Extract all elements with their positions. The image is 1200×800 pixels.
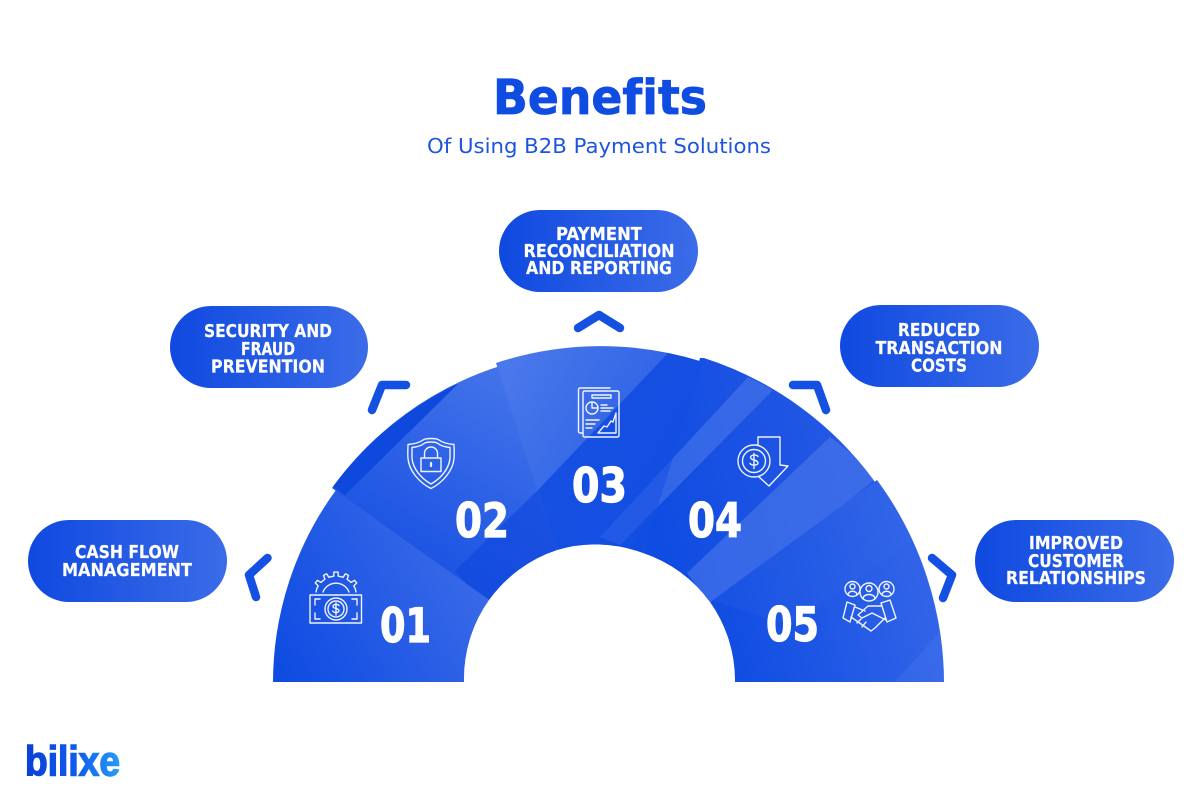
- number 03: 03: [572, 459, 627, 514]
- semicircle chart: [273, 346, 950, 682]
- subtitle: Of Using B2B Payment Solutions: [427, 134, 771, 158]
- icon: report document: [578, 388, 619, 437]
- pill: security and fraud prevention: [170, 306, 368, 388]
- icon: cash and gear: [310, 572, 362, 623]
- pill: improved customer relationships: CUSTOMER: [1028, 552, 1124, 572]
- pill: payment reconciliation and reporting: PAYMENT: [556, 225, 642, 245]
- pill: security and fraud prevention: SECURITY AND: [204, 322, 332, 342]
- number 01: 01: [380, 599, 431, 654]
- pill: payment reconciliation and reporting: RECONCILIATION: [524, 242, 674, 262]
- pill: security and fraud prevention: FRAUD: [241, 340, 295, 360]
- pill: payment reconciliation and reporting: AND REPORTING: [526, 259, 672, 279]
- arrow: to customer relationships: [932, 558, 952, 598]
- pill: security and fraud prevention: PREVENTION: [211, 358, 325, 378]
- pill: cash flow management: CASH FLOW: [75, 543, 179, 563]
- arrow: to security: [372, 385, 406, 410]
- arrow: to cash flow: [249, 558, 268, 597]
- pill: payment reconciliation and reporting: [499, 210, 698, 292]
- segment 02: [332, 366, 557, 600]
- segment 05: [710, 480, 950, 682]
- pill: reduced transaction costs: TRANSACTION: [876, 339, 1002, 359]
- title: Benefits: [493, 70, 707, 126]
- arrow: to transaction costs: [793, 385, 826, 410]
- number 05: 05: [766, 598, 819, 653]
- arrow: to reconciliation: [578, 315, 620, 328]
- pill: cash flow management: MANAGEMENT: [62, 561, 192, 581]
- pill: improved customer relationships: [975, 520, 1174, 602]
- segment 01: [273, 490, 489, 682]
- number 02: 02: [455, 494, 509, 549]
- logo: bilixe: [25, 738, 120, 784]
- icon: customer handshake: [843, 582, 896, 631]
- pill: improved customer relationships: IMPROVED: [1029, 534, 1123, 554]
- pill: reduced transaction costs: COSTS: [911, 356, 967, 376]
- pill: cash flow management: [28, 520, 227, 602]
- icon: security shield: [408, 438, 454, 488]
- segment 03: [496, 346, 700, 553]
- segment 04: [643, 358, 875, 602]
- number 04: 04: [688, 494, 742, 549]
- pill: reduced transaction costs: REDUCED: [898, 321, 980, 341]
- icon: cost reduction: [738, 437, 788, 486]
- pill: reduced transaction costs: [840, 305, 1039, 387]
- pill: improved customer relationships: RELATIONSHIPS: [1006, 569, 1146, 589]
